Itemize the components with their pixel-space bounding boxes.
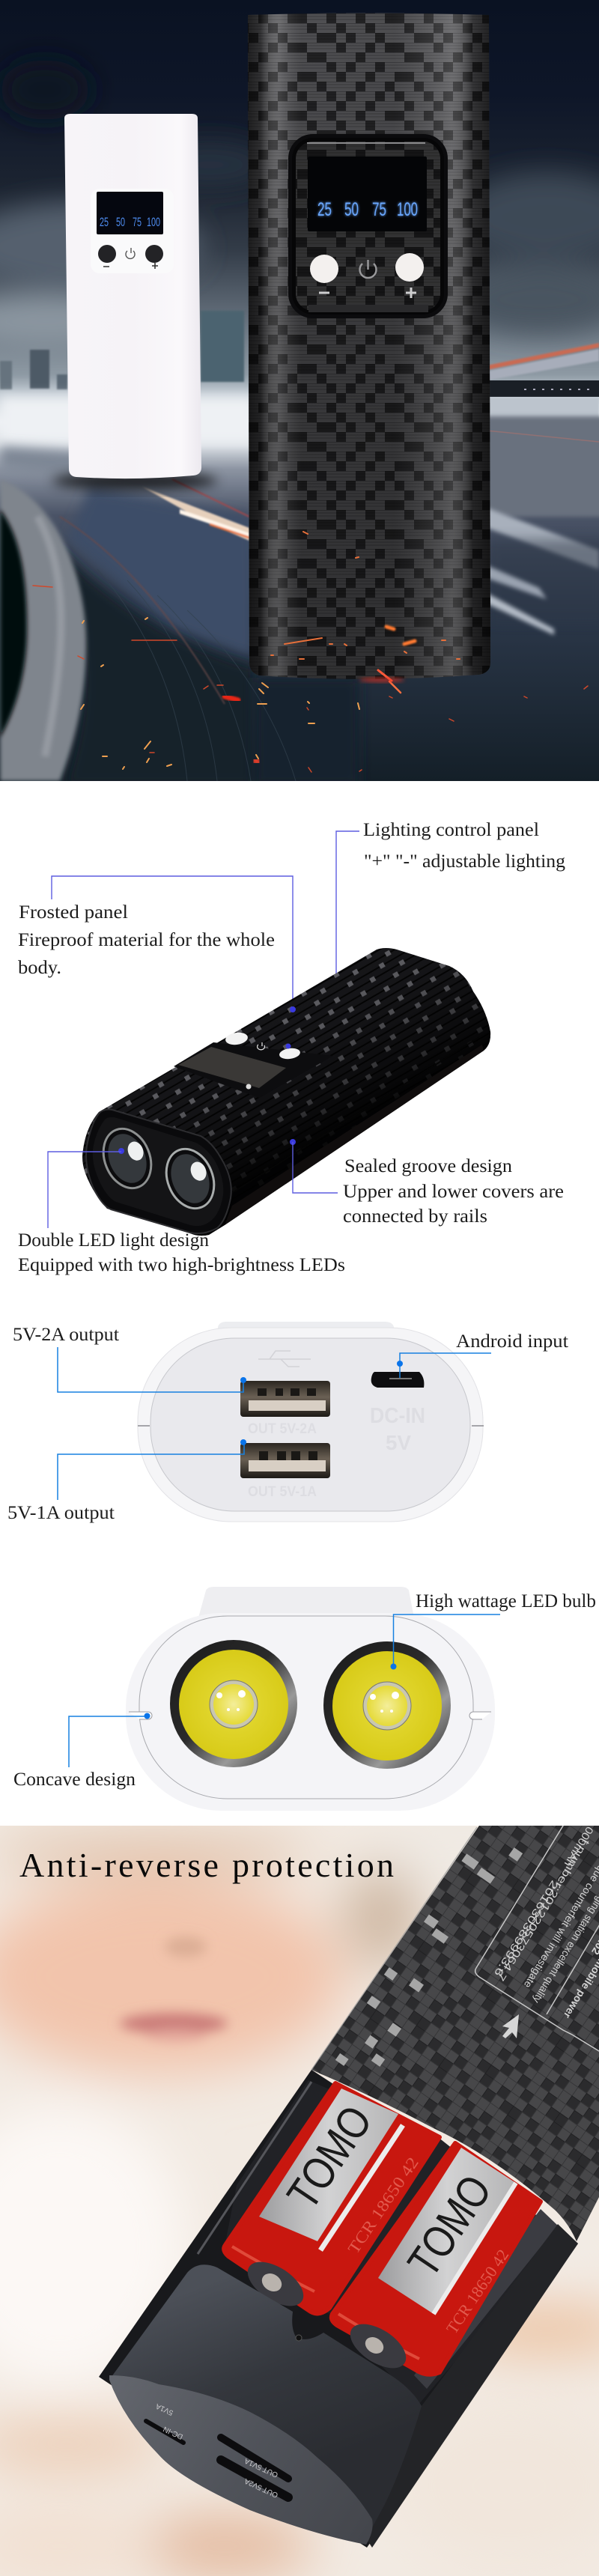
right lens (158, 1142, 222, 1215)
callout: frosted panel (18, 876, 293, 1009)
inner face (150, 1338, 470, 1511)
lighting control description: "+" "-" adjustable lighting (364, 851, 566, 872)
device: white power bank (52, 114, 217, 490)
road light trail (60, 479, 249, 704)
upper USB port (240, 1381, 330, 1417)
top tab (218, 1322, 394, 1340)
white device buttons (98, 245, 163, 269)
callout: lighting control panel (288, 820, 566, 1046)
LED bulb label: High wattage LED bulb (416, 1591, 596, 1611)
lower USB port (240, 1443, 330, 1478)
flashlight body (82, 948, 490, 1236)
embossed port labels (248, 1404, 425, 1500)
specification text (492, 1824, 599, 2021)
callout: high wattage LED bulb (391, 1591, 596, 1670)
inner outline (139, 1616, 473, 1799)
callout: Android input (397, 1331, 568, 1378)
black device screen (308, 157, 427, 231)
tray inner walls (198, 2080, 578, 2548)
white control panel (91, 189, 174, 273)
concave label: Concave design (13, 1770, 136, 1790)
embossed port labels: OUT 5V-1A (248, 1484, 317, 1500)
top tab (198, 1587, 414, 1617)
black device levels: 100 (397, 199, 418, 220)
outer shell (126, 1613, 495, 1811)
product: white LED end (126, 1587, 495, 1811)
sparks on device (271, 532, 460, 681)
end face port labels: 5V1A (154, 2402, 174, 2416)
bright edge squares (335, 1847, 523, 2067)
end face ports (146, 2421, 288, 2497)
right LED lens (323, 1641, 451, 1769)
black device levels: 25 (317, 199, 332, 220)
shell seam marks (138, 1425, 484, 1427)
product: black flashlight power bank at an angle (82, 948, 490, 1236)
micro USB port (371, 1372, 424, 1388)
white device levels: 75 (133, 215, 142, 229)
callout: 5V-2A output (13, 1325, 246, 1392)
white device levels: 50 (116, 215, 125, 229)
right horizon streaks (479, 343, 599, 635)
sealed groove description: connected by rails (343, 1206, 487, 1227)
battery one (224, 2083, 440, 2315)
double LED description: Equipped with two high-brightness LEDs (18, 1255, 345, 1275)
sealed groove description (343, 1182, 564, 1227)
5V-2A label: 5V-2A output (13, 1325, 119, 1345)
battery one brand: TOMO (278, 2097, 382, 2218)
black device levels: 50 (344, 199, 359, 220)
lighting control heading: Lighting control panel (363, 820, 539, 840)
end face port labels: OUT 5V2A (243, 2476, 279, 2499)
title: Anti-reverse protection (19, 1846, 394, 1884)
control bezel (292, 138, 444, 315)
device: tray base (99, 2070, 578, 2548)
black device levels (316, 201, 419, 218)
embossed port labels: DC-IN (370, 1404, 425, 1428)
white device levels: 25 (100, 215, 109, 229)
callout: 5V-1A output (7, 1439, 246, 1523)
white device screen (97, 192, 163, 234)
USB symbol (258, 1351, 311, 1367)
flashlight control panel (174, 1031, 333, 1098)
white body (64, 114, 201, 479)
double LED heading: Double LED light design (18, 1230, 209, 1251)
specification text: t number:201220573064.7 (495, 1837, 592, 1984)
specification text: 201630389993.6 (492, 1878, 561, 1979)
battery two brand: TOMO (398, 2166, 501, 2285)
end face port labels: OUT 5V1A (243, 2456, 279, 2479)
sparks on road (33, 586, 588, 772)
arrow mark (502, 2014, 519, 2038)
end face port labels: DC-IN (162, 2425, 184, 2440)
panel: hero with road scene and two power banks (0, 0, 599, 786)
callout: double LED light design (18, 1152, 345, 1275)
black body with checker texture (248, 13, 490, 679)
pointer dots (118, 1006, 296, 1154)
frosted panel heading: Frosted panel (19, 902, 128, 923)
black device buttons (310, 253, 424, 298)
device: black power bank (248, 13, 490, 682)
blurred baby background (0, 1820, 599, 2576)
left LED lens (170, 1640, 297, 1767)
battery one model: TCR 18650 42 (344, 2154, 422, 2257)
panel: anti-reverse protection photo (0, 1816, 599, 2576)
end face (109, 2375, 373, 2545)
battery two model: TCR 18650 42 (443, 2246, 512, 2337)
grey road swoosh (0, 479, 86, 781)
product: white USB port end (138, 1322, 484, 1522)
black device levels: 75 (372, 199, 386, 220)
scene: night sky and motion road (0, 0, 599, 786)
specification label box (475, 1816, 599, 2097)
left lens (95, 1122, 159, 1195)
left road colour bands (0, 397, 359, 786)
sealed groove heading: Sealed groove design (344, 1156, 513, 1176)
end cap with ports (109, 2264, 422, 2545)
road arc streaks (116, 580, 297, 781)
concave notches (129, 1712, 491, 1719)
device: textured cover (311, 1816, 599, 2241)
frosted panel description: Fireproof material for the whole (18, 930, 275, 950)
embossed port labels: 5V (386, 1431, 411, 1454)
callout: sealed groove design (293, 1142, 564, 1227)
specification text: 000mAh (562, 1824, 596, 1869)
battery two (332, 2143, 541, 2377)
callout: concave design (13, 1713, 150, 1790)
cap screw (296, 2335, 302, 2341)
city buildings (0, 311, 244, 389)
flashlight head (86, 1110, 231, 1233)
white device levels: 100 (147, 215, 160, 229)
Android input label: Android input (456, 1331, 568, 1352)
outer shell (138, 1328, 483, 1522)
frosted panel description (18, 930, 275, 978)
end face port labels (154, 2402, 279, 2499)
5V-1A label: 5V-1A output (7, 1503, 115, 1523)
white device levels (100, 217, 160, 226)
embossed port labels: OUT 5V-2A (248, 1421, 317, 1437)
frosted panel description: body. (18, 958, 61, 978)
sealed groove description: Upper and lower covers are (343, 1182, 564, 1202)
